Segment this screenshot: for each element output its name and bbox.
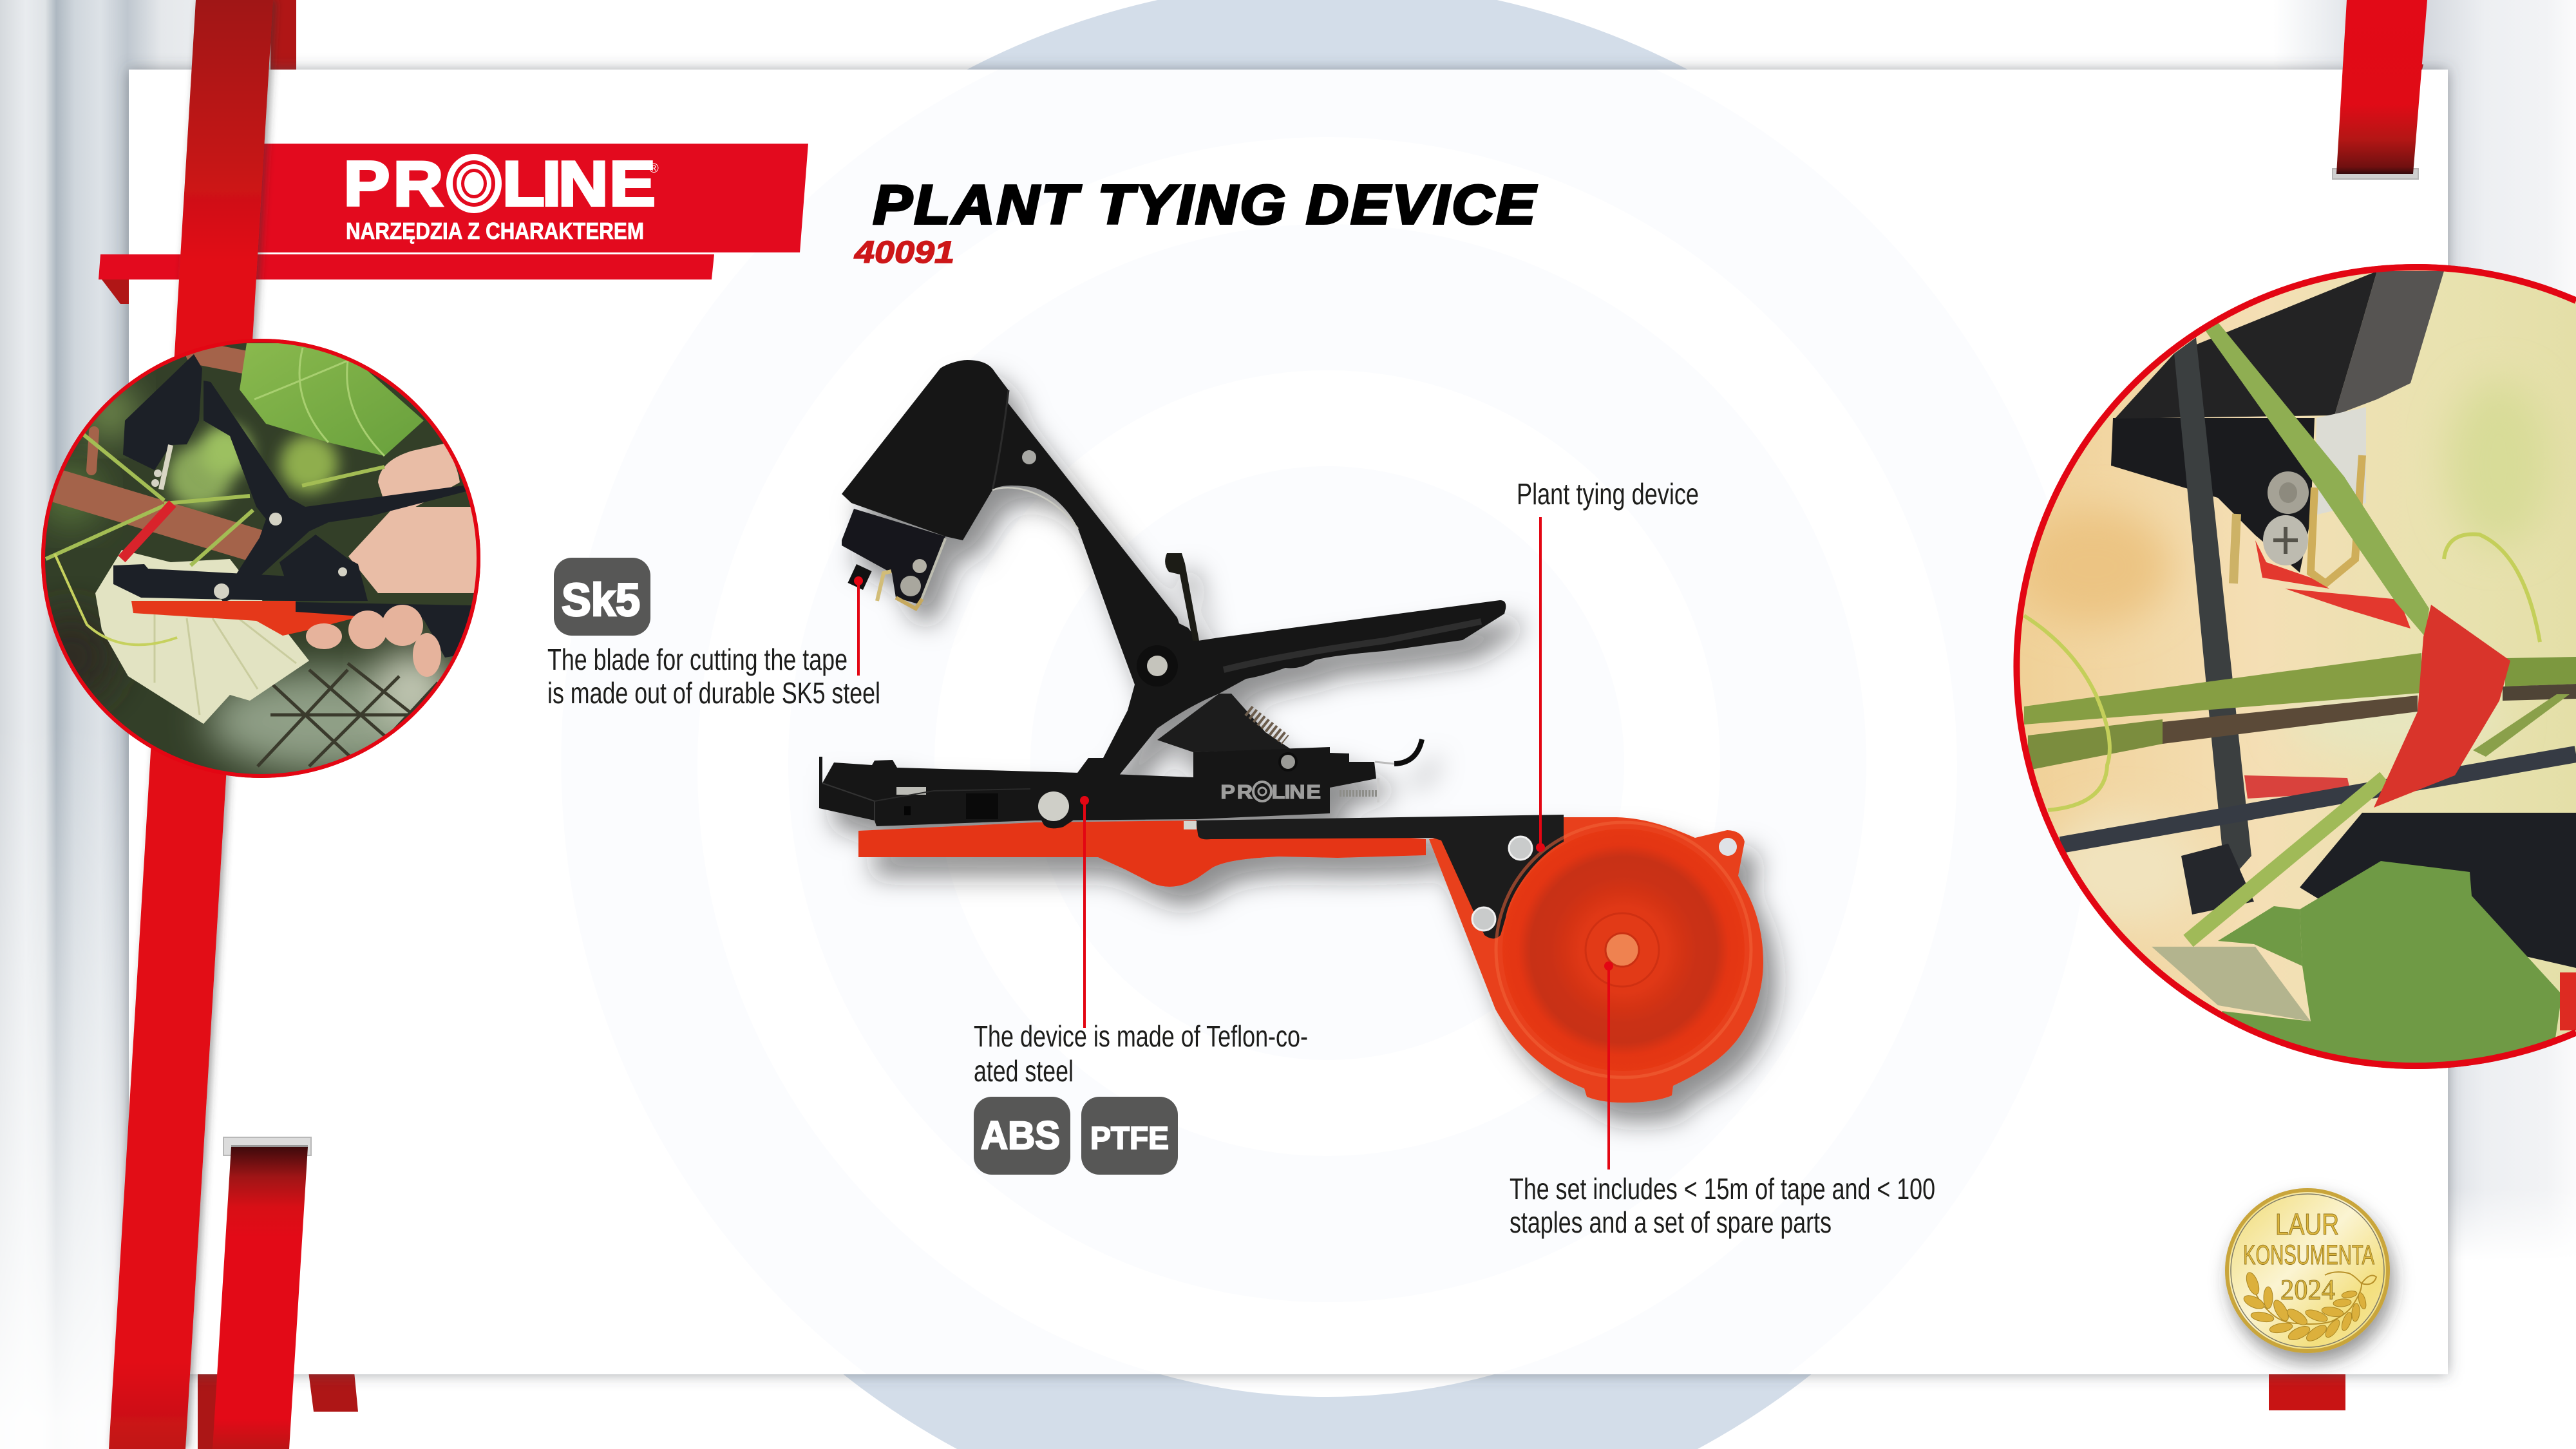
text: teflon coated steel: ated steel <box>974 1054 1074 1088</box>
vine stems <box>46 435 384 645</box>
text: blade material <box>547 643 880 710</box>
laurel branch <box>2242 1271 2376 1344</box>
coil spring <box>1248 710 1285 740</box>
green vine leaf <box>240 343 424 456</box>
logo band <box>99 144 808 304</box>
red tie tape <box>122 504 173 559</box>
reel hub <box>1586 913 1659 987</box>
red tie <box>2374 605 2510 808</box>
mechanism body <box>1157 694 1291 752</box>
text: set contents: staples and a set of spare parts <box>1510 1206 1832 1239</box>
badge: Sk5: Sk5 <box>562 575 640 626</box>
red base bar <box>858 820 1426 887</box>
frame details <box>822 783 1197 829</box>
mini device black parts <box>113 354 471 658</box>
panel background concentric rings <box>561 70 2094 1397</box>
long left ribbon <box>109 0 273 1449</box>
device brand mark: PR OLINE <box>1220 781 1321 803</box>
bracket bolts <box>1472 837 1532 931</box>
mini device red bar <box>131 601 361 636</box>
red band lower <box>99 254 714 279</box>
trigger latch <box>1165 553 1199 641</box>
badge: ABS: ABS <box>981 1113 1060 1157</box>
band fold <box>102 279 129 304</box>
blurred warm background <box>2009 258 2576 1075</box>
reel rim <box>1496 822 1751 1077</box>
lower jaw block <box>842 509 945 605</box>
silver bracket in mini device <box>161 445 171 489</box>
dark housing <box>2115 271 2377 419</box>
logo target ring <box>446 154 502 213</box>
blurred foliage background <box>45 343 474 774</box>
wire spring arm <box>1394 739 1422 764</box>
photo: device in use on vine <box>26 335 489 786</box>
callout: steel body <box>1080 796 1089 1028</box>
award medal: Laur Konsumenta 2024 <box>2227 1190 2388 1351</box>
gold prong <box>2233 514 2237 583</box>
medal text: KONSUMENTA <box>2243 1240 2374 1271</box>
pale leaf underside <box>95 550 309 724</box>
horizontal rod <box>2061 754 2576 845</box>
black bracket arm <box>1196 815 1564 939</box>
mini device pins <box>151 469 347 599</box>
red band upper <box>256 144 808 252</box>
reel axle <box>1605 933 1639 967</box>
title: PLANT TYING DEVICE <box>873 174 1537 235</box>
handle highlight <box>1224 621 1481 670</box>
lower frame <box>819 747 1376 826</box>
reel hang hole <box>1719 838 1737 856</box>
green leaf <box>2218 861 2562 1095</box>
arm, handle and head <box>842 360 1506 828</box>
text: teflon coated steel <box>974 1019 1308 1088</box>
screws and blade parts on head <box>848 538 945 609</box>
grey cover face <box>2334 271 2444 415</box>
red feed tape <box>2255 540 2410 629</box>
tagline: NARZĘDZIA Z CHARAKTEREM <box>346 218 644 244</box>
text: set contents <box>1510 1172 1935 1239</box>
fence mesh <box>258 663 438 766</box>
badge: PTFE <box>1081 1097 1178 1175</box>
pivot and pins <box>1022 450 1296 821</box>
tendrils <box>2024 534 2540 810</box>
bottom-left ribbon with slot <box>213 1137 311 1449</box>
product code: 40091 <box>854 236 954 270</box>
hand <box>348 444 480 593</box>
diagonal stem <box>2188 778 2385 941</box>
medal text: LAUR <box>2275 1208 2339 1241</box>
reel face <box>1502 829 1745 1071</box>
badge: Sk5 <box>554 558 650 636</box>
callout: plant tying device <box>1536 517 1545 852</box>
plant tying device illustration <box>819 360 1763 1103</box>
rusty pipe <box>56 353 260 547</box>
medal text <box>2243 1208 2374 1305</box>
badge: ABS <box>974 1097 1070 1175</box>
medal text: 2024 <box>2280 1274 2335 1305</box>
head cover seam and arch edge <box>992 390 1078 529</box>
callout: tape reel <box>1604 961 1613 1170</box>
text: teflon coated steel: The device is made of Teflon-co- <box>974 1019 1308 1053</box>
red tip at edge <box>2560 972 2576 1030</box>
text: blade material: is made out of durable SK5 steel <box>547 676 880 710</box>
gold bracket <box>2311 455 2362 583</box>
text: set contents: The set includes < 15m of tape and < 100 <box>1510 1172 1935 1206</box>
vertical wire rod <box>2174 337 2251 885</box>
photo: tape tying the stem close-up <box>2009 258 2576 1095</box>
label: plant tying device: Plant tying device <box>1517 477 1699 511</box>
badge: PTFE: PTFE <box>1090 1121 1169 1156</box>
screws <box>2263 471 2309 565</box>
logo wordmark: PR OLINE <box>344 149 656 219</box>
red tape reel body <box>1429 817 1763 1103</box>
silver plate <box>2315 407 2366 515</box>
top-right ribbon with slot <box>2333 0 2427 179</box>
adjusting screw <box>1340 762 1394 802</box>
machine below <box>2300 813 2576 968</box>
fingers <box>306 605 441 677</box>
stems <box>2024 321 2576 770</box>
silhouette with drop shadow <box>819 360 1763 1103</box>
medal disc <box>2227 1190 2388 1351</box>
text: blade material: The blade for cutting the tape <box>547 643 848 676</box>
registered mark: ® <box>649 162 659 176</box>
dark lower block <box>2111 418 2315 573</box>
pale leaf <box>2152 947 2311 1021</box>
callout: blade <box>854 576 863 676</box>
